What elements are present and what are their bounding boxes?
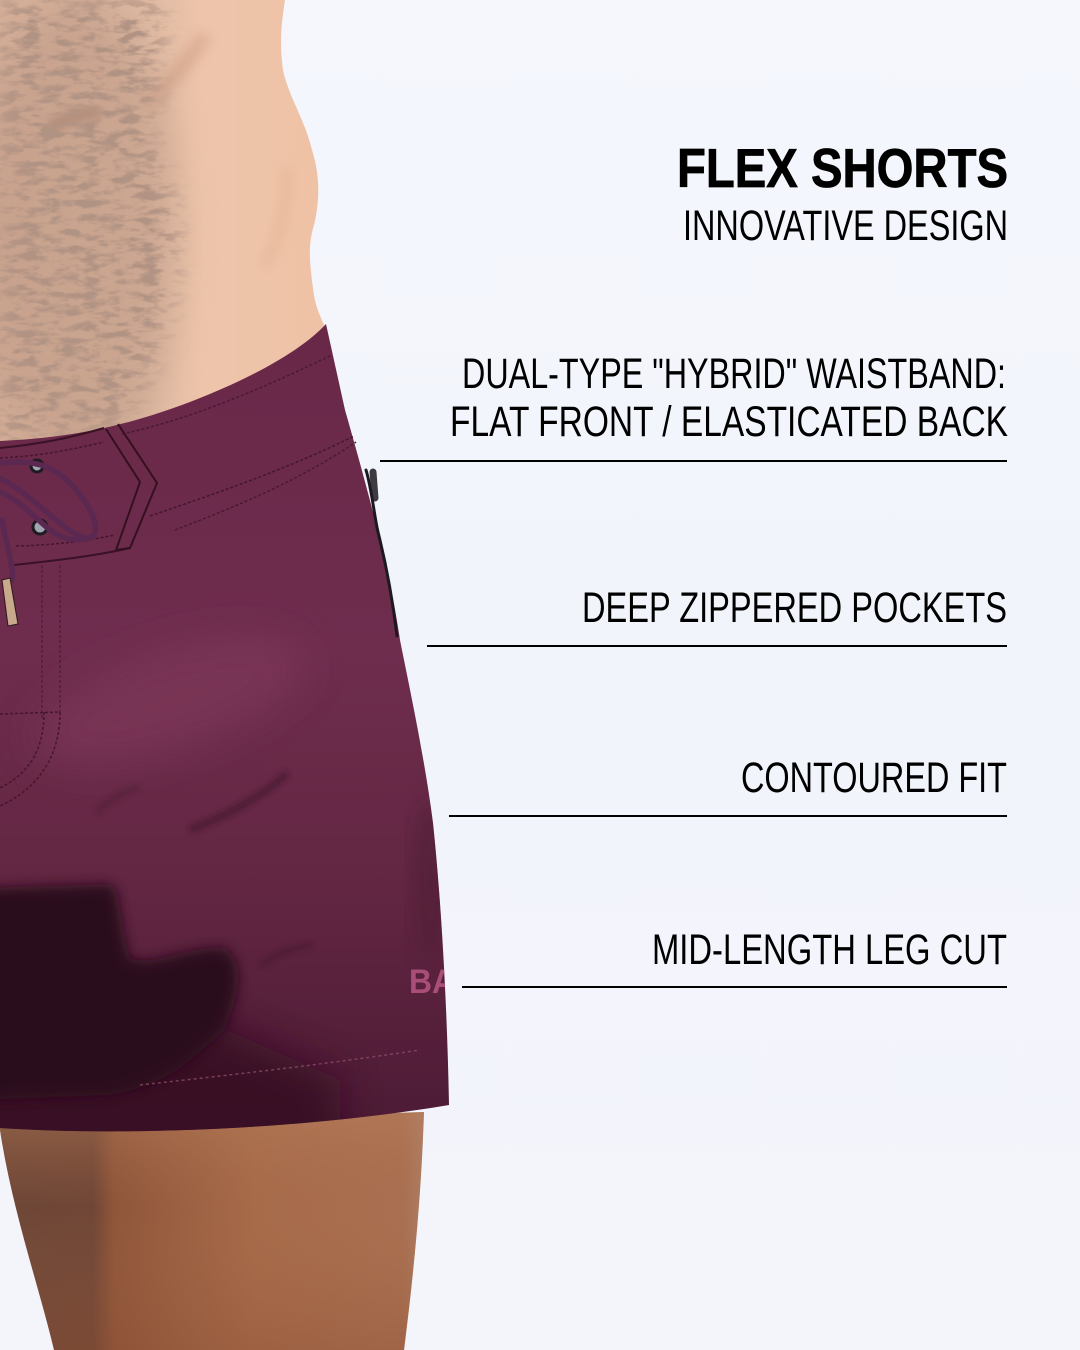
torso [0,0,326,475]
leg [0,1112,424,1350]
drawstring [0,462,96,580]
chest hair texture [0,0,177,445]
zipper pocket [366,470,397,636]
feature: waistband [380,350,1008,462]
eyelets [31,460,47,534]
cord tip [2,578,18,626]
title: FLEX SHORTS [677,137,1008,199]
shorts [0,324,455,1200]
waistband stitching [0,355,420,1085]
fly flap [106,424,157,550]
fabric highlights and shadows [50,650,284,760]
photo: model wearing shorts [0,0,455,1350]
logo on leg: BA [409,963,455,1001]
